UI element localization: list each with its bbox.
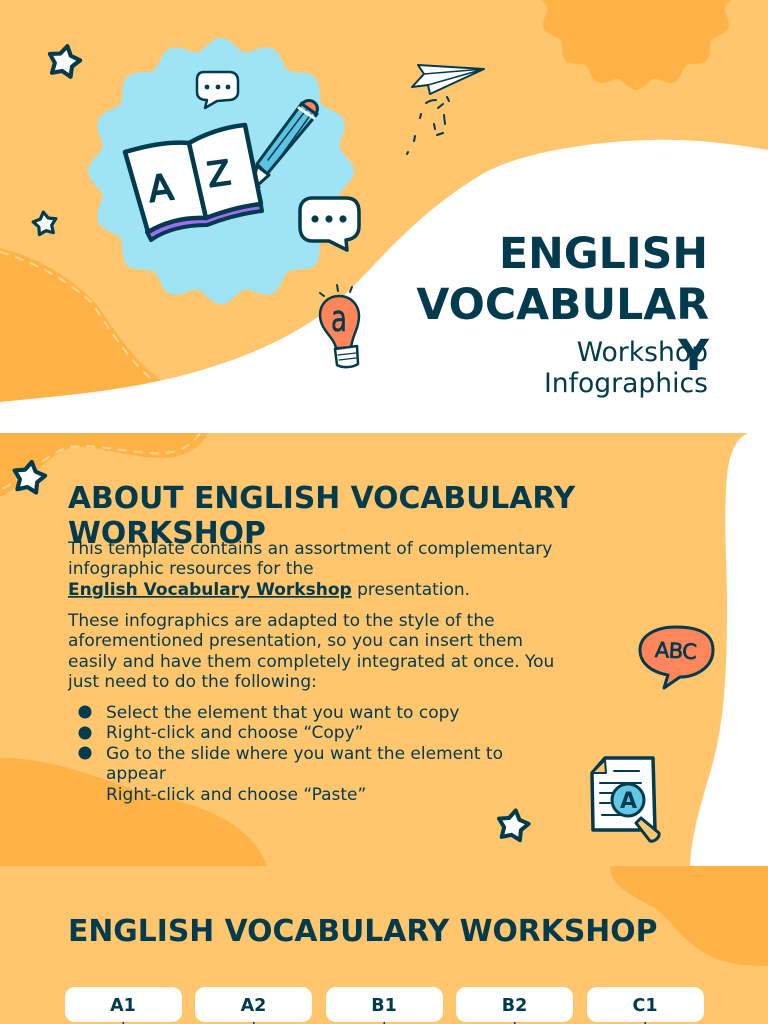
subtitle: Infographics bbox=[544, 368, 708, 399]
letter a: a bbox=[331, 299, 347, 340]
white wave right bbox=[690, 433, 768, 866]
icon: star about slide bottom bbox=[496, 808, 531, 841]
text block: explanation bbox=[67, 611, 554, 692]
icon: paper plane bbox=[407, 65, 484, 154]
bullet list: Go to the slide where you want the element to bbox=[106, 744, 503, 764]
text block: intro bbox=[67, 539, 552, 600]
title: Y bbox=[677, 331, 710, 381]
text block: explanation: just need to do the following: bbox=[67, 672, 317, 692]
blob top right bbox=[610, 866, 768, 966]
text block: explanation: aforementioned presentation, so you can insert them bbox=[68, 631, 523, 651]
title: ENGLISH bbox=[499, 229, 708, 279]
heading: about: ABOUT ENGLISH VOCABULARY bbox=[68, 481, 576, 516]
heading: levels: ENGLISH VOCABULARY WORKSHOP bbox=[68, 914, 657, 949]
blob top left bbox=[0, 433, 208, 497]
blob bottom left bbox=[0, 758, 267, 866]
bullet list: Right-click and choose “Paste” bbox=[106, 785, 366, 805]
blob bottom left bbox=[0, 248, 166, 410]
text block: intro: This template contains an assortment of complementary bbox=[67, 539, 552, 559]
icon: light bulb bbox=[320, 285, 359, 367]
icon: pencil bbox=[250, 100, 317, 191]
icon: ABC speech bubble bbox=[640, 627, 713, 688]
bullet list: Select the element that you want to copy bbox=[106, 703, 459, 723]
level box C1: C1 bbox=[632, 996, 658, 1016]
level box A2 bbox=[195, 987, 312, 1024]
level box B2: B2 bbox=[502, 996, 527, 1016]
panel: levels slide bbox=[0, 866, 768, 1024]
level box A2: A2 bbox=[241, 996, 266, 1016]
level box B1 bbox=[326, 987, 443, 1024]
icon: star about slide top bbox=[12, 459, 47, 494]
icon: document with magnifier: A bbox=[620, 789, 637, 814]
text block: intro: English Vocabulary Workshop presentation. bbox=[68, 580, 470, 600]
icon: open book bbox=[125, 125, 262, 240]
title bbox=[416, 229, 710, 381]
panel: about slide bbox=[0, 433, 768, 866]
level box B2 bbox=[456, 987, 573, 1024]
level box B1: B1 bbox=[371, 996, 397, 1016]
level box C1 bbox=[587, 987, 704, 1024]
icon: star top left bbox=[46, 43, 82, 78]
icon: small speech bubble bbox=[197, 72, 238, 108]
white wave bbox=[0, 140, 768, 433]
subtitle: Workshop bbox=[577, 337, 708, 368]
bullet list: Right-click and choose “Copy” bbox=[106, 723, 363, 743]
subtitle bbox=[544, 337, 708, 399]
icon: ABC speech bubble: ABC bbox=[654, 638, 698, 664]
level box A1 bbox=[65, 987, 182, 1024]
heading: about bbox=[68, 481, 576, 551]
sun shape top right bbox=[536, 0, 736, 90]
level box A1: A1 bbox=[110, 996, 136, 1016]
icon: large speech bubble bbox=[300, 198, 359, 250]
letter Z: Z bbox=[205, 153, 233, 196]
bullet list: appear bbox=[106, 764, 166, 784]
text block: explanation: These infographics are adapted to the style of the bbox=[67, 611, 495, 631]
icon: document with magnifier bbox=[592, 758, 659, 841]
letter A: A bbox=[146, 167, 176, 211]
panel: cover slide bbox=[0, 0, 768, 433]
text block: explanation: easily and have them completely integrated at once. You bbox=[68, 652, 554, 672]
text block: intro: infographic resources for the bbox=[68, 559, 314, 579]
icon: scalloped blue badge bbox=[88, 38, 354, 304]
icon: star left bbox=[32, 211, 58, 235]
heading: about: WORKSHOP bbox=[68, 516, 266, 551]
title: VOCABULAR bbox=[416, 280, 709, 330]
bullet list bbox=[78, 703, 503, 805]
